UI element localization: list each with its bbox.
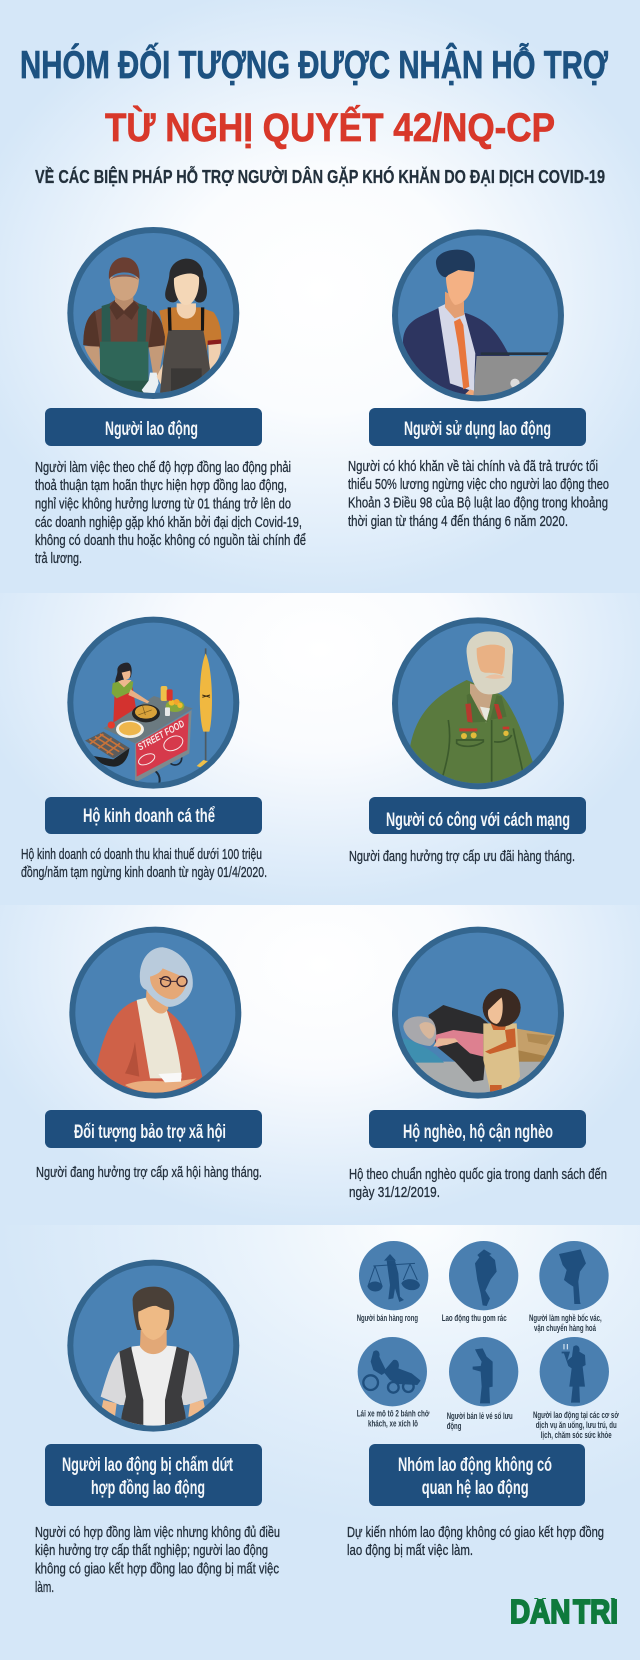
text block: người lao động: thoả thuận tạm hoãn thực hiện hợp đồng lao động, [35, 478, 287, 494]
label: nhóm lao động không có quan hệ lao động [369, 1444, 585, 1506]
icon: street food cart: STREET FOOD [136, 719, 187, 753]
icon: street vendor [359, 1241, 428, 1310]
icon: elderly woman with cup [69, 927, 241, 1099]
text block: người lao động [35, 460, 306, 567]
text block: người lao động: không có doanh thu hoặc không có nguồn tài chính để [35, 533, 306, 549]
icon: two workers [67, 227, 239, 400]
text block: người lao động bị chấm dứt: Người có hợp đồng làm việc nhưng không đủ điều [35, 1525, 280, 1541]
icon: young worker [67, 1260, 239, 1432]
icon: motorbike and cyclo driver [358, 1337, 427, 1406]
text block: người lao động bị chấm dứt: không có giao kết hợp đồng lao động bị mất việc [35, 1562, 279, 1578]
label: người lao động bị chấm dứt hợp đồng: Người lao động bị chấm dứt [62, 1454, 233, 1476]
text block: người lao động bị chấm dứt [35, 1525, 280, 1596]
icon: porter [539, 1241, 609, 1310]
text block: nhóm lao động không có quan hệ: lao động bị mất việc làm. [347, 1543, 473, 1559]
label: nhóm lao động không có quan hệ lao động: Nhóm lao động không có [398, 1454, 552, 1476]
label: hộ kinh doanh cá thể [45, 797, 262, 834]
label: người lao động: Người lao động [105, 418, 198, 440]
label: người sử dụng lao động: Người sử dụng lao động [404, 418, 551, 440]
icon: poor family [392, 927, 564, 1099]
captions: informal worker types: Lái xe mô tô 2 bánh chở [357, 1408, 430, 1419]
captions: informal worker types: Người bán lẻ vé số lưu [447, 1410, 513, 1421]
panel: hộ kinh doanh cá thể, người có công [0, 593, 640, 905]
captions: informal worker types: vận chuyển hàng hoá [534, 1322, 597, 1333]
captions: informal worker types: khách, xe xích lô [368, 1418, 418, 1429]
panel: người lao động bị chấm dứt, nhóm không có quan hệ lao động [0, 1225, 640, 1660]
icon: war veteran [392, 617, 564, 789]
panel: đối tượng bảo trợ xã hội, hộ nghèo [0, 905, 640, 1225]
text block: người lao động bị chấm dứt: làm. [35, 1580, 54, 1596]
label: đối tượng bảo trợ xã hội: Đối tượng bảo trợ xã hội [74, 1121, 226, 1143]
text block: người lao động bị chấm dứt: kiện hưởng trợ cấp thất nghiệp; người lao động [35, 1543, 268, 1559]
label: người lao động bị chấm dứt hợp đồng: hợp đồng lao động [91, 1477, 205, 1499]
text block: hộ kinh doanh cá thể: Hộ kinh doanh có doanh thu khai thuế dưới 100 triệu [21, 847, 262, 863]
captions: informal worker types: động [447, 1420, 462, 1431]
captions: informal worker types [357, 1312, 619, 1440]
label: người lao động bị chấm dứt hợp đồng [45, 1444, 262, 1506]
icon group: informal worker types [358, 1241, 609, 1406]
text block: hộ nghèo [349, 1167, 607, 1201]
icon: street food cart [67, 617, 239, 791]
logo: Dân Trí: DÂN TRÍ [510, 1593, 619, 1630]
title line 2: TỪ NGHỊ QUYẾT 42/NQ-CP [105, 104, 555, 150]
text block: người lao động: nghỉ việc không hưởng lương từ 01 tháng trở lên do [35, 496, 291, 512]
text block: nhóm lao động không có quan hệ [347, 1525, 604, 1559]
label: hộ nghèo, hộ cận nghèo [369, 1110, 586, 1148]
label: người có công với cách mạng [369, 797, 586, 834]
label: nhóm lao động không có quan hệ lao động: quan hệ lao động [422, 1477, 529, 1499]
captions: informal worker types: Người bán hàng rong [357, 1312, 418, 1323]
label: hộ kinh doanh cá thể: Hộ kinh doanh cá thể [83, 805, 215, 827]
label: hộ nghèo, hộ cận nghèo: Hộ nghèo, hộ cận nghèo [403, 1121, 553, 1143]
text block: hộ nghèo: ngày 31/12/2019. [349, 1185, 440, 1201]
icon: garbage collector [449, 1241, 518, 1310]
captions: informal worker types: Người làm nghề bốc vác, [529, 1312, 602, 1323]
text block: người lao động: Người làm việc theo chế độ hợp đồng lao động phải [35, 460, 291, 476]
label: người lao động [45, 408, 262, 446]
label: người sử dụng lao động [369, 408, 586, 446]
text block: người sử dụng lao động [348, 459, 609, 530]
captions: informal worker types: Lao động thu gom rác [442, 1312, 507, 1323]
text block: hộ kinh doanh cá thể: đồng/năm tạm ngừng kinh doanh từ ngày 01/4/2020. [21, 865, 267, 881]
icon: business man with laptop [392, 229, 564, 401]
label: đối tượng bảo trợ xã hội [45, 1110, 262, 1148]
text block: đối tượng bảo trợ xã hội: Người đang hưởng trợ cấp xã hội hàng tháng. [36, 1165, 262, 1181]
text block: người lao động: trả lương. [35, 551, 82, 567]
icon: service worker [540, 1337, 609, 1406]
text block: người lao động: các doanh nghiệp gặp khó khăn bởi đại dịch Covid-19, [35, 515, 302, 531]
icon: lottery seller [449, 1337, 518, 1406]
text block: hộ kinh doanh cá thể [21, 847, 267, 881]
text block: người sử dụng lao động: thời gian từ tháng 4 đến tháng 6 năm 2020. [348, 514, 568, 530]
panel: header and người lao động, người sử dụng lao động [0, 0, 640, 593]
